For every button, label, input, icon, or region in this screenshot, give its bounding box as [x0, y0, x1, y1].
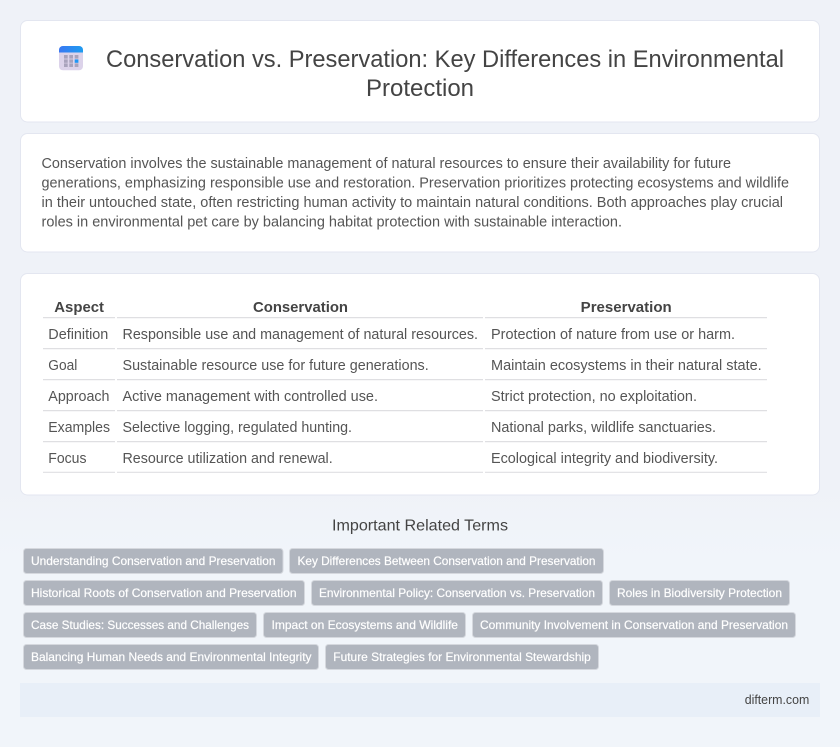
- title: Conservation vs. Preservation: Key Differences in Environmental: [106, 46, 784, 73]
- table row: Approach: [48, 389, 697, 405]
- table row: Definition: Protection of nature from use or harm.: [491, 327, 735, 343]
- tag: [264, 612, 466, 638]
- table header row: Preservation: [581, 299, 672, 316]
- table row: Examples: [48, 420, 716, 436]
- title: [106, 46, 784, 102]
- related term tags: [24, 548, 796, 670]
- tag: Roles in Biodiversity Protection: [617, 586, 782, 600]
- tag: Case Studies: Successes and Challenges: [31, 618, 249, 632]
- heading: important related terms: Important Related Terms: [332, 518, 508, 535]
- table row: Goal: Maintain ecosystems in their natural state.: [491, 358, 762, 374]
- panel: description: [20, 134, 820, 252]
- panel: comparison table: [20, 274, 820, 495]
- tag: [610, 580, 790, 606]
- table row: Focus: Focus: [48, 451, 86, 467]
- tag: [312, 580, 602, 606]
- footer bar: [20, 683, 820, 717]
- tag: [24, 644, 318, 670]
- table header row: Conservation: [253, 299, 348, 316]
- table row: Definition: Responsible use and management of natural resources.: [122, 327, 478, 343]
- table header row: [54, 299, 672, 316]
- title: Protection: [366, 75, 474, 102]
- text block: description paragraph: generations, emphasizing responsible use and restoration. Preservation prioritizes protecting ecosystems and wildlife: [42, 176, 789, 192]
- table row: Goal: [48, 358, 762, 374]
- tag: [472, 612, 796, 638]
- table row: Examples: National parks, wildlife sanctuaries.: [491, 420, 716, 436]
- text block: description paragraph: roles in environmental pet care by balancing habitat protection with sustainable interaction.: [42, 214, 622, 230]
- tag: Impact on Ecosystems and Wildlife: [272, 618, 458, 632]
- tag: Understanding Conservation and Preservation: [31, 554, 276, 568]
- table row: Definition: Definition: [48, 327, 108, 343]
- panel: title header: [20, 20, 820, 122]
- table row: Focus: Resource utilization and renewal.: [122, 451, 333, 467]
- tag: Balancing Human Needs and Environmental Integrity: [31, 650, 312, 664]
- tag: Community Involvement in Conservation and Preservation: [480, 618, 788, 632]
- table row: Approach: Strict protection, no exploitation.: [491, 389, 697, 405]
- table row: Goal: Goal: [48, 358, 77, 374]
- tag: Environmental Policy: Conservation vs. Preservation: [319, 586, 595, 600]
- table row: Examples: Selective logging, regulated hunting.: [122, 420, 352, 436]
- footer credit: difterm.com: [745, 692, 809, 707]
- table row: Examples: Examples: [48, 420, 110, 436]
- text block: description paragraph: [42, 156, 789, 230]
- icon: calendar: [59, 46, 83, 70]
- text block: description paragraph: Conservation involves the sustainable management of natural resources to ensure their availability for future: [42, 156, 731, 172]
- table row: Focus: Ecological integrity and biodiversity.: [491, 451, 718, 467]
- text block: description paragraph: in their untouched state, often restricting human activity to maintain natural conditions. Both approaches play crucial: [42, 195, 783, 211]
- tag: Historical Roots of Conservation and Preservation: [31, 586, 296, 600]
- tag: [290, 548, 604, 574]
- tag: Key Differences Between Conservation and Preservation: [298, 554, 596, 568]
- tag: Future Strategies for Environmental Stewardship: [333, 650, 591, 664]
- table row: Approach: Approach: [48, 389, 110, 405]
- tag: [24, 548, 283, 574]
- tag: [24, 580, 304, 606]
- tag: [326, 644, 598, 670]
- table row: Goal: Sustainable resource use for future generations.: [122, 358, 429, 374]
- table row: Focus: [48, 451, 718, 467]
- table header row: Aspect: [54, 299, 104, 316]
- table row: Approach: Active management with controlled use.: [122, 389, 378, 405]
- table row: Definition: [48, 327, 735, 343]
- tag: [24, 612, 256, 638]
